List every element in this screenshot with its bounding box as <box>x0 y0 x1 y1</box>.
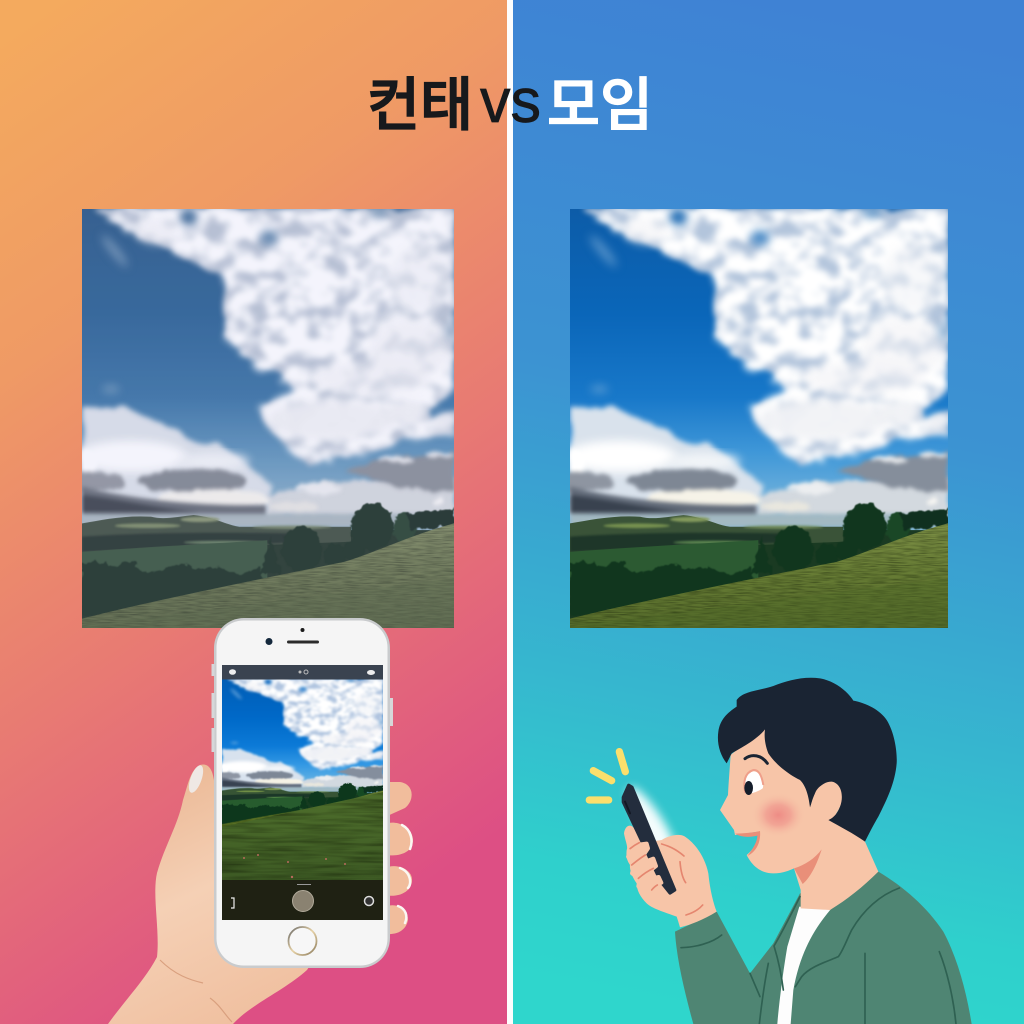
person with phone <box>589 678 972 1024</box>
left panel background <box>0 0 507 1024</box>
jacket sleeve and body <box>675 872 972 1024</box>
gripping fingers <box>628 844 661 889</box>
mouth <box>735 831 760 856</box>
home button <box>288 927 316 955</box>
center divider <box>507 0 513 1024</box>
eye <box>744 770 763 795</box>
hand palm and thumb <box>108 764 320 1024</box>
finger nails <box>398 825 411 923</box>
camera bottom bar <box>222 880 383 920</box>
sparkle lines <box>589 752 625 800</box>
phone screen photo <box>222 680 383 827</box>
title <box>367 67 653 138</box>
thumb nail <box>186 763 206 795</box>
hand back and palm <box>624 826 717 927</box>
cheek blush <box>751 792 806 838</box>
finger lines <box>630 843 703 915</box>
hair <box>718 678 897 842</box>
white shirt <box>777 907 831 1024</box>
fingers <box>385 782 413 934</box>
neck and face <box>720 728 878 910</box>
title: vs <box>480 67 541 136</box>
title: 컨태 <box>367 73 473 138</box>
neck shadow <box>794 849 822 884</box>
phone body <box>214 618 390 968</box>
phone side port <box>625 802 630 813</box>
jacket seams <box>681 888 956 1024</box>
front camera and speaker <box>266 628 319 645</box>
hand holding phone <box>108 618 413 1024</box>
eyebrow <box>745 756 767 763</box>
thumb <box>662 836 687 857</box>
camera top bar <box>222 665 383 680</box>
phone foreground grass <box>222 792 383 880</box>
small phone in hand <box>623 785 675 893</box>
side buttons <box>212 664 393 752</box>
photo: vivid landscape <box>557 208 949 628</box>
right panel background <box>513 0 1024 1024</box>
wrist crease <box>160 960 232 1022</box>
photo: dull landscape <box>69 208 455 628</box>
title: 모임 <box>547 73 653 138</box>
glow from phone <box>627 787 677 880</box>
ear <box>811 782 842 820</box>
